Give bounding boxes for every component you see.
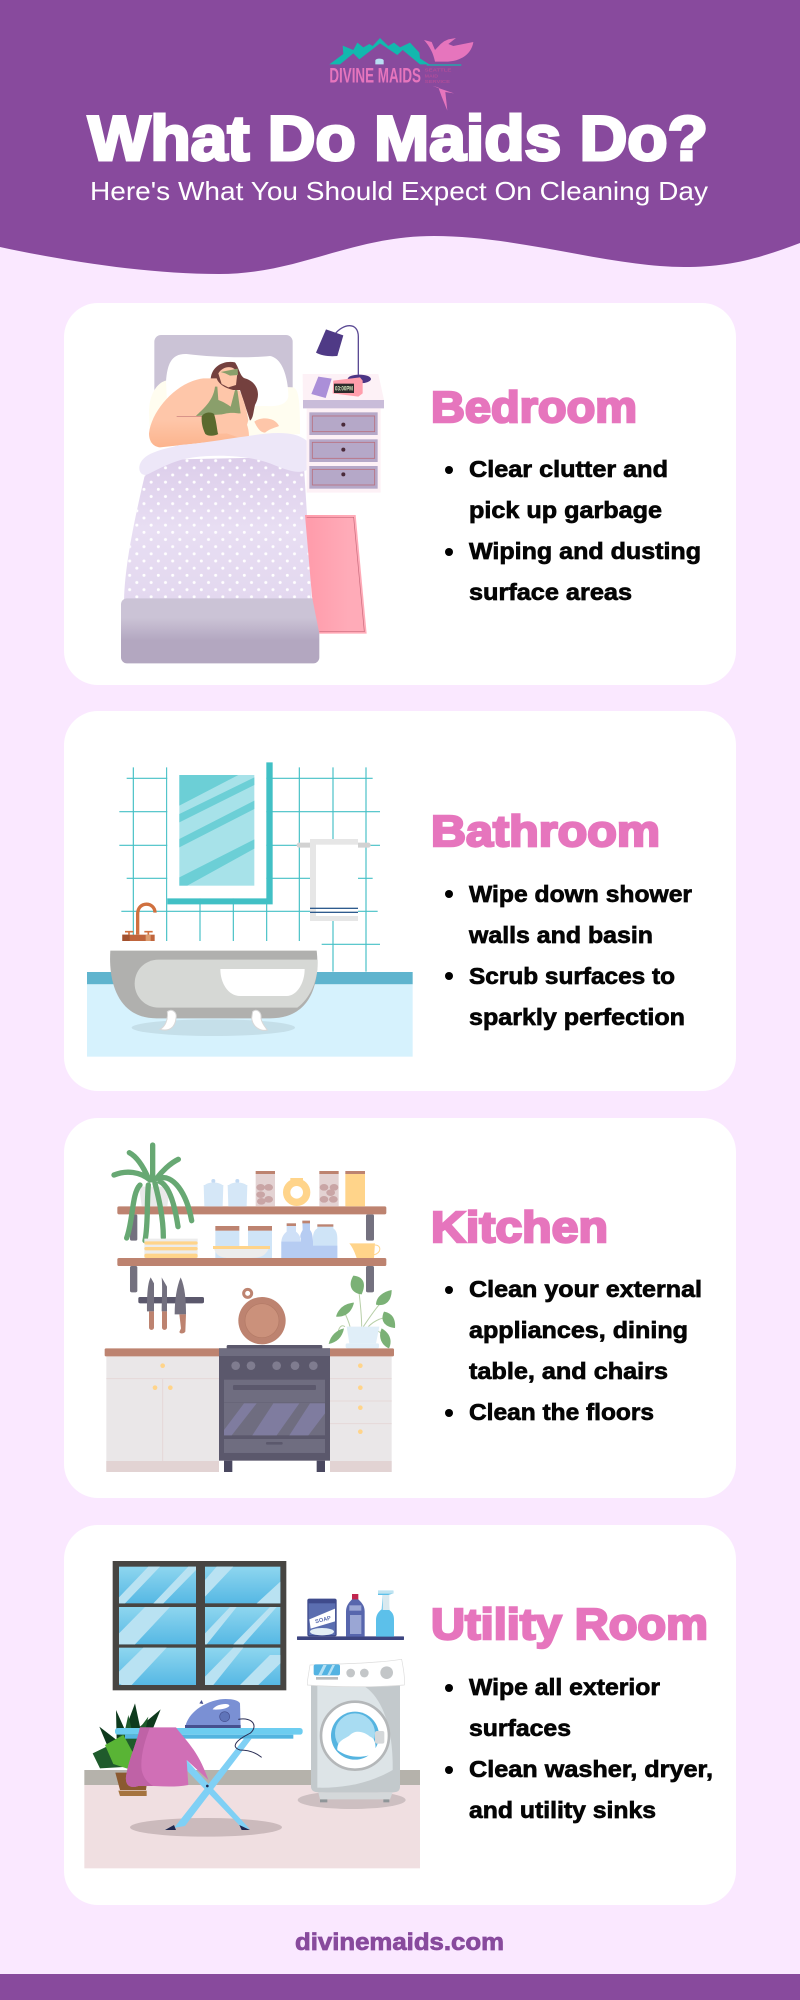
mirror	[179, 775, 254, 886]
utility list	[445, 1674, 713, 1823]
pillow	[166, 354, 288, 407]
kitchen card	[64, 1118, 736, 1498]
hand on blanket	[213, 413, 249, 441]
panel: utility room	[64, 1525, 736, 1905]
bedroom list: Clear clutter and	[469, 456, 668, 482]
bathtub	[132, 1019, 295, 1036]
hair	[211, 362, 258, 421]
bathroom illustration	[87, 762, 413, 1057]
footer bar	[0, 1974, 800, 2000]
bottom shelf items	[144, 1221, 380, 1258]
panel: bathroom	[64, 711, 736, 1091]
fern	[114, 1145, 192, 1241]
rug	[305, 515, 367, 634]
faucet	[122, 904, 155, 941]
header banner	[0, 0, 800, 274]
bathroom list: walls and basin	[468, 922, 653, 948]
kitchen list	[445, 1276, 702, 1425]
logo: Divine Maids: DIVINE MAIDS	[329, 63, 421, 87]
kitchen list: table, and chairs	[469, 1358, 668, 1384]
stove	[219, 1345, 330, 1472]
bathroom heading: Bathroom	[431, 807, 660, 856]
shelves	[117, 1206, 386, 1214]
spray bottle	[376, 1591, 394, 1637]
nightstand	[303, 374, 384, 493]
hanging cloth	[126, 1727, 208, 1787]
blanket fold	[139, 433, 307, 475]
bathroom list: sparkly perfection	[469, 1004, 685, 1030]
shelf brackets	[130, 1214, 374, 1292]
window	[113, 1561, 286, 1690]
utility card	[64, 1525, 736, 1905]
top shelf jars	[204, 1171, 365, 1206]
duvet	[124, 457, 312, 600]
wall shelf	[297, 1636, 404, 1640]
kitchen list: appliances, dining	[469, 1317, 688, 1343]
floor and baseboard	[84, 1785, 420, 1868]
utility list: and utility sinks	[469, 1797, 656, 1823]
cutting board	[238, 1289, 286, 1344]
footboard	[121, 598, 319, 663]
logo: Divine Maids: MAID	[425, 73, 438, 78]
logo: Divine Maids	[329, 38, 473, 111]
bathroom list: Wipe down shower	[469, 881, 692, 907]
logo: Divine Maids: SEATTLE	[425, 68, 451, 73]
kitchen list: Clean your external	[469, 1276, 702, 1302]
utility list: Wipe all exterior	[469, 1674, 660, 1700]
panel: kitchen	[64, 1118, 736, 1498]
title: What Do Maids Do?	[88, 104, 708, 174]
ironing board	[115, 1728, 303, 1830]
bathroom list: Scrub surfaces to	[469, 963, 675, 989]
utility list: surfaces	[469, 1715, 571, 1741]
bathroom card	[64, 711, 736, 1091]
bedroom list	[445, 456, 701, 605]
phone	[311, 377, 332, 398]
bedroom list: Wiping and dusting	[469, 538, 701, 564]
footer url: divinemaids.com	[295, 1929, 504, 1956]
knife rack	[138, 1277, 204, 1333]
fern pot	[139, 1187, 170, 1206]
cabinets	[106, 1356, 392, 1472]
utility list: Clean washer, dryer,	[469, 1756, 713, 1782]
bedroom list: surface areas	[469, 579, 632, 605]
bedroom illustration	[121, 326, 384, 663]
countertop	[105, 1348, 394, 1356]
washing machine	[298, 1659, 406, 1809]
potted plant	[329, 1276, 395, 1348]
clothes iron	[185, 1699, 262, 1757]
panel: bedroom	[64, 303, 736, 685]
kitchen heading: Kitchen	[431, 1203, 608, 1252]
second hand	[254, 418, 279, 433]
bedroom card	[64, 303, 736, 685]
utility heading: Utility Room	[431, 1600, 708, 1649]
eye mask	[221, 369, 238, 376]
towel	[297, 843, 371, 848]
soap box: SOAP	[315, 1616, 332, 1625]
drawers	[309, 412, 378, 489]
kitchen list: Clean the floors	[469, 1399, 654, 1425]
bathroom list	[445, 881, 692, 1030]
alarm clock	[333, 377, 363, 397]
bedroom heading: Bedroom	[431, 383, 637, 432]
sleeping woman	[149, 378, 248, 447]
scrunchie	[202, 412, 218, 436]
mirror frame	[167, 763, 266, 898]
lamp	[348, 375, 371, 383]
plant	[93, 1703, 161, 1796]
utility illustration	[84, 1561, 420, 1868]
face	[218, 367, 237, 387]
bedroom list: pick up garbage	[469, 497, 662, 523]
kitchen illustration	[105, 1145, 395, 1472]
wall tiles	[119, 767, 380, 972]
subtitle: Here's What You Should Expect On Cleaning Day	[90, 176, 708, 206]
bedroom illustration: 03:00PM	[335, 387, 353, 393]
top	[196, 387, 241, 416]
ironing board shadow	[130, 1818, 282, 1837]
sheet	[149, 381, 300, 443]
detergent bottle	[346, 1594, 365, 1637]
arm line	[177, 415, 203, 417]
soap box	[307, 1599, 337, 1636]
logo: Divine Maids: SERVICE	[425, 79, 450, 84]
floor	[87, 972, 413, 984]
headboard	[154, 335, 293, 425]
